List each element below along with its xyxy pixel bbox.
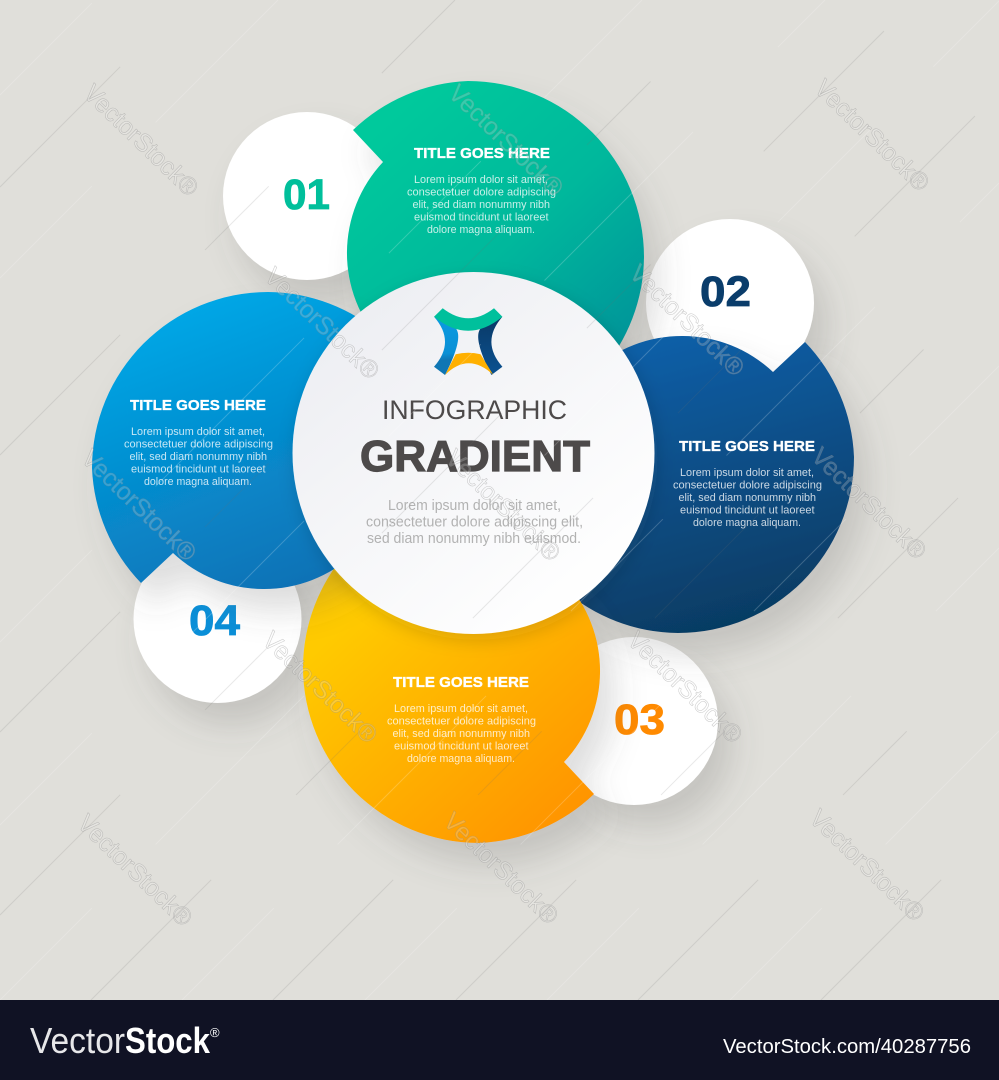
panel: yellow circle 03: Lorem ipsum dolor sit amet, [394,703,528,715]
badge 01: 01 [283,171,330,219]
panel: center circle [292,272,654,634]
center description: sed diam nonummy nibh euismod. [367,531,581,547]
watermarks: VectorStock® [438,807,564,931]
panel: navy circle 02: elit, sed diam nonummy nibh [678,492,816,504]
panel: blue circle 04: euismod tincidunt ut laoreet [131,464,266,476]
watermarks: VectorStock® [624,259,750,383]
watermarks: VectorStock® [78,79,204,203]
badge 02 [646,219,814,387]
watermarks: VectorStock® [804,804,930,928]
panel: navy circle 02: euismod tincidunt ut laoreet [680,504,814,516]
badge 02: 02 [700,268,751,316]
heading: gradient: GRADIENT [360,432,590,481]
footer bar [0,1000,999,1080]
panel: yellow circle 03: TITLE GOES HERE [393,674,529,691]
panel: green circle 01: consectetuer dolore adipiscing [407,186,556,198]
watermarks [72,74,935,933]
panel: navy circle 02: consectetuer dolore adipiscing [673,480,822,492]
watermarks: VectorStock® [259,262,385,386]
panel: blue circle 04 [92,292,383,589]
panel: yellow circle 03: dolore magna aliquam. [407,753,515,765]
watermarks: VectorStock® [257,626,383,750]
footer logo: ® [210,1025,220,1040]
watermarks: VectorStock® [443,79,569,203]
badge 04: 04 [189,597,240,645]
watermarks: VectorStock® [440,444,566,568]
panel: green circle 01: euismod tincidunt ut laoreet [414,212,548,224]
panel: green circle 01: Lorem ipsum dolor sit amet, [414,174,548,186]
watermarks: VectorStock® [806,442,932,566]
badge 03: 03 [614,696,665,744]
badge 01 [223,112,391,280]
panel: navy circle 02: TITLE GOES HERE [679,438,815,455]
panel: blue circle 04: consectetuer dolore adipiscing [124,438,273,450]
panel: yellow circle 03 [303,552,600,843]
icon: gradient logo [434,308,502,375]
panel: blue circle 04: Lorem ipsum dolor sit amet, [131,426,265,438]
heading: infographic: INFOGRAPHIC [382,395,567,425]
watermarks: VectorStock® [622,626,748,750]
watermarks: VectorStock® [809,74,935,198]
center description: consectetuer dolore adipiscing elit, [366,514,583,530]
footer url: VectorStock.com/40287756 [723,1036,971,1058]
footer logo: VectorStock [30,1020,223,1061]
panel: green circle 01: dolore magna aliquam. [427,224,535,236]
panel: navy circle 02: dolore magna aliquam. [693,517,801,529]
panel: navy circle 02 [563,336,854,633]
panel: navy circle 02: Lorem ipsum dolor sit amet, [680,467,814,479]
panel: yellow circle 03: elit, sed diam nonummy nibh [392,728,530,740]
panel: green circle 01: TITLE GOES HERE [414,145,550,162]
panel: blue circle 04: TITLE GOES HERE [130,397,266,414]
panel: yellow circle 03: euismod tincidunt ut laoreet [394,740,528,752]
panel: blue circle 04: dolore magna aliquam. [144,476,252,488]
panel: green circle 01 [347,81,644,372]
center description [366,498,583,547]
badge 03 [550,637,718,805]
panel: blue circle 04: elit, sed diam nonummy nibh [130,451,267,463]
panel: yellow circle 03: consectetuer dolore adipiscing [387,716,536,728]
badge 04 [134,535,302,703]
watermarks: VectorStock® [76,444,202,568]
panel: green circle 01: elit, sed diam nonummy nibh [412,199,550,211]
watermarks: VectorStock® [72,809,198,933]
center description: Lorem ipsum dolor sit amet, [388,498,561,514]
